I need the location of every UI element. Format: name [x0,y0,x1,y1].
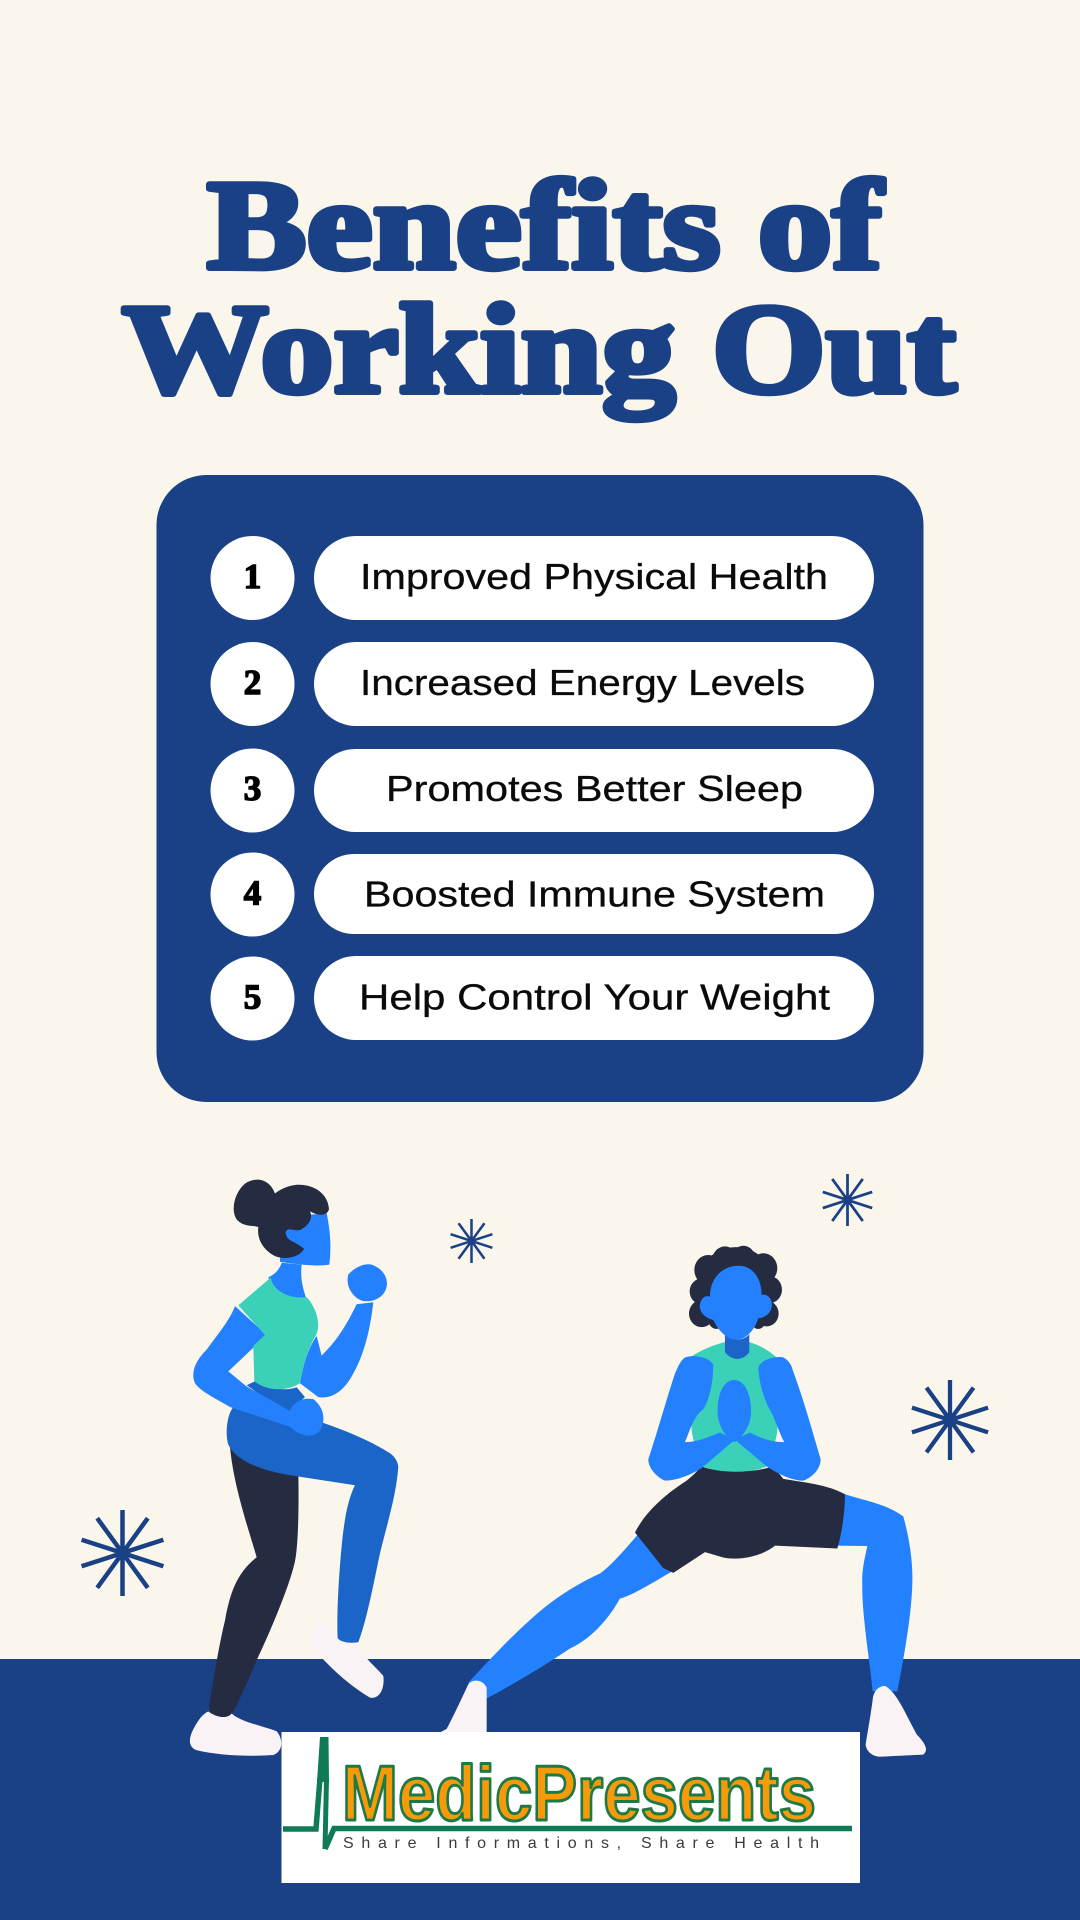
item 2: 2 [244,663,261,702]
logo wordmark: MedicPresents [342,1749,816,1837]
icon: star right [912,1380,988,1460]
title line 2: Working Out [122,278,956,420]
item 5 [210,956,874,1040]
item 2 [210,642,874,726]
item 1 [210,536,874,620]
title [122,154,956,420]
item 3 [210,748,874,832]
item 3: 3 [244,769,261,808]
item 5: 5 [244,978,261,1016]
item 1: Improved Physical Health [360,556,828,597]
item 5: Help Control Your Weight [359,976,830,1018]
bottom band [0,1659,1080,1920]
item 4: Boosted Immune System [364,874,825,914]
item 4 [210,852,874,936]
icon: star top right [823,1174,872,1226]
figure: woman marching [190,1180,398,1756]
logo pulse line [283,1737,852,1849]
item 3: Promotes Better Sleep [386,768,803,809]
item 2: Increased Energy Levels [360,662,805,703]
figure: woman lunging [437,1246,926,1757]
icon: star left [82,1510,163,1596]
icon: star small centre [451,1219,492,1263]
panel: benefits list [156,475,924,1102]
item 4: 4 [244,874,261,912]
logo tagline: Share Informations, Share Health [343,1835,819,1852]
logo: MedicPresents [282,1732,860,1883]
item 1: 1 [244,557,261,596]
title line 1: Benefits of [207,154,884,296]
